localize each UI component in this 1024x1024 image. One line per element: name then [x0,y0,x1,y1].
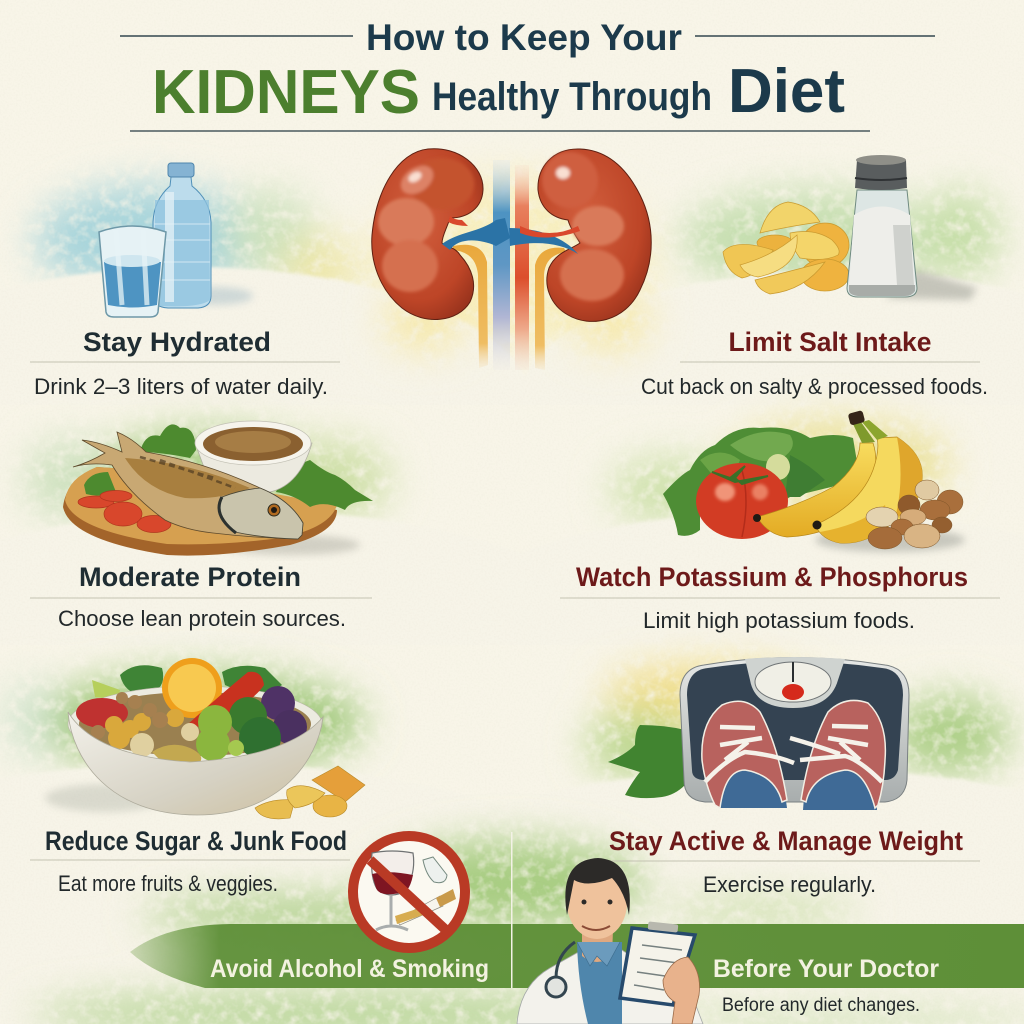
heading: Watch Potassium & Phosphorus [576,562,968,592]
background colour washes: lower row [5,666,1010,777]
description: Choose lean protein sources. [58,606,346,631]
heading: Stay Hydrated [83,327,271,357]
icon: salt shaker [847,155,917,297]
heading: Moderate Protein [79,562,301,592]
icon: kidneys [372,149,651,370]
panel: potassium and phosphorus [560,410,1000,633]
icon: grilled fish [73,432,303,539]
bottom green band [130,832,1024,988]
icon: chips [723,202,849,294]
board shadow [220,535,360,555]
callout: avoid alcohol and smoking [210,836,489,983]
background colour washes: top row [35,175,1000,345]
description: Drink 2–3 liters of water daily. [34,374,328,399]
label: Avoid Alcohol & Smoking [210,955,489,983]
panel: stay active [590,657,980,897]
panel: stay hydrated [30,163,340,399]
white hills: top row [38,266,990,358]
icon: doctor [517,858,703,1024]
icon: right shoe [790,700,885,808]
right kidney [538,149,651,321]
icon: cutting board [63,467,337,556]
icon: parsley [608,725,685,798]
icon: bowl rim [68,686,322,762]
shaker shadow [885,270,977,300]
icon: tomato slices [78,490,171,532]
title [120,17,935,131]
callout: before your doctor [517,858,939,1024]
description: Cut back on salty & processed foods. [641,374,988,399]
bowl shadow [45,784,165,812]
vessels [493,160,510,370]
heading: Reduce Sugar & Junk Food [45,826,347,856]
description: Before any diet changes. [722,995,920,1016]
shadow [815,528,965,552]
icon: bowl contents [76,658,311,762]
icon: no alcohol no smoking [353,836,465,948]
icon: bananas [753,410,922,543]
icon: herbs behind [84,424,373,510]
icon: water bottle [153,163,211,308]
icon: tomato [696,463,788,539]
white hills: middle row [56,514,889,554]
renal veins and arteries [442,218,510,250]
icon: left shoe [702,701,794,808]
icon: crackers [255,766,365,819]
panel: reduce sugar [30,658,365,896]
description: Limit high potassium foods. [643,608,915,633]
icon: bathroom scale [680,657,909,802]
lower green wash [30,840,1024,1024]
panel: limit salt [641,155,988,399]
icon: clipboard [620,921,695,1005]
title line 1: How to Keep Your [366,17,682,58]
label: Before Your Doctor [713,955,939,983]
panel: moderate protein [30,421,373,631]
background colour washes: middle row [25,420,950,530]
heading: Stay Active & Manage Weight [609,826,963,856]
icon: nuts [866,480,963,549]
background colour washes: yellow around kidneys [385,290,650,350]
icon: jeans [720,767,877,810]
title word KIDNEYS: KIDNEYS [152,58,420,127]
icon: bowl of lentils [195,421,312,493]
title words Healthy Through: Healthy Through [432,75,712,119]
icon: salad leaves [92,665,282,700]
icon: glass of water [99,226,166,317]
shadow [177,287,253,305]
icon: leafy greens [663,427,860,536]
title word Diet: Diet [728,57,845,126]
doctor hand [663,957,700,1024]
white hills: lower row [56,766,996,800]
icon: bowl body [68,712,323,815]
left kidney [372,149,483,319]
heading: Limit Salt Intake [728,327,932,357]
description: Eat more fruits & veggies. [58,871,278,896]
description: Exercise regularly. [703,872,876,897]
